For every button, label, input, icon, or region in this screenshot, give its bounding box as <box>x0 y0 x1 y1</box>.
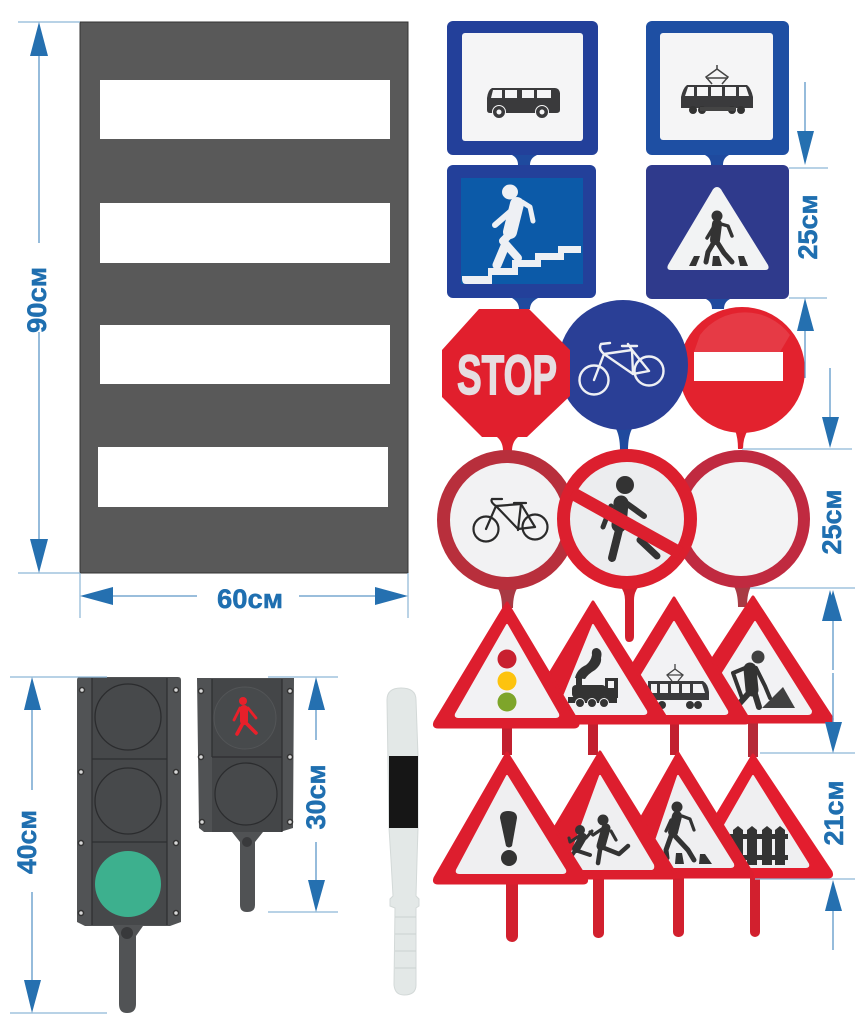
sign: tram stop <box>646 21 789 165</box>
sign: tram warning <box>600 598 749 755</box>
dimension: 21 cm <box>755 590 855 950</box>
traffic light: large with green signal <box>77 677 181 1013</box>
sign: pedestrian crossing <box>646 165 789 309</box>
sign: no entry <box>679 307 805 449</box>
sign: traffic lights warning <box>434 603 578 755</box>
dimension: 40 cm: 40см <box>12 810 42 874</box>
sign: no bicycles ring <box>444 456 570 608</box>
dimension: 25 cm lower: 25см <box>817 490 847 554</box>
sign: stop octagon <box>442 309 570 451</box>
dimension: 21 cm: 21см <box>819 780 849 846</box>
icon: person on stairs <box>462 184 581 284</box>
sign: blank prohibition ring <box>678 456 804 607</box>
sign: no pedestrians ring <box>564 456 690 642</box>
dimension: 25 cm upper <box>789 82 828 378</box>
sign: road works <box>674 597 832 757</box>
traffic controller baton <box>387 688 419 995</box>
sign: stop octagon: STOP <box>457 343 557 406</box>
dimension: 30 cm: 30см <box>301 764 331 830</box>
sign: bicycle path <box>558 300 688 450</box>
dimension: 30 cm <box>268 677 338 912</box>
sign: fence warning <box>680 755 832 937</box>
icon: tram <box>681 65 753 114</box>
icon: running children <box>569 814 628 863</box>
traffic light: small pedestrian <box>197 678 294 912</box>
icon: red pedestrian <box>234 697 256 734</box>
sign: bus stop <box>447 21 598 165</box>
icon: walking person <box>603 476 657 558</box>
icon: steam locomotive <box>568 648 618 708</box>
row: lower warning triangles <box>434 752 832 942</box>
dimension: 60 cm <box>80 573 408 618</box>
dimension: 90 cm <box>18 22 80 573</box>
sign: children warning <box>525 752 676 938</box>
sign: underground crossing <box>447 165 596 309</box>
row: upper warning triangles <box>434 597 832 757</box>
sign: general warning <box>434 753 587 942</box>
sign: railway crossing <box>522 602 668 755</box>
dimension: 60 cm: 60см <box>217 584 283 614</box>
sign: pedestrian warning <box>608 753 753 937</box>
dimension: 90 cm: 90см <box>22 267 52 333</box>
icon: exclamation mark <box>500 811 517 866</box>
dimension: 40 cm <box>10 677 107 1013</box>
panel: pedestrian crossing mat <box>80 22 408 573</box>
icon: pedestrian on zebra <box>689 210 748 266</box>
icon: white bicycle <box>580 343 664 394</box>
icon: black bicycle <box>474 499 548 542</box>
dimension: 25 cm lower <box>742 368 855 621</box>
icon: bus <box>487 88 560 118</box>
dimension: 25 cm upper: 25см <box>793 194 823 260</box>
